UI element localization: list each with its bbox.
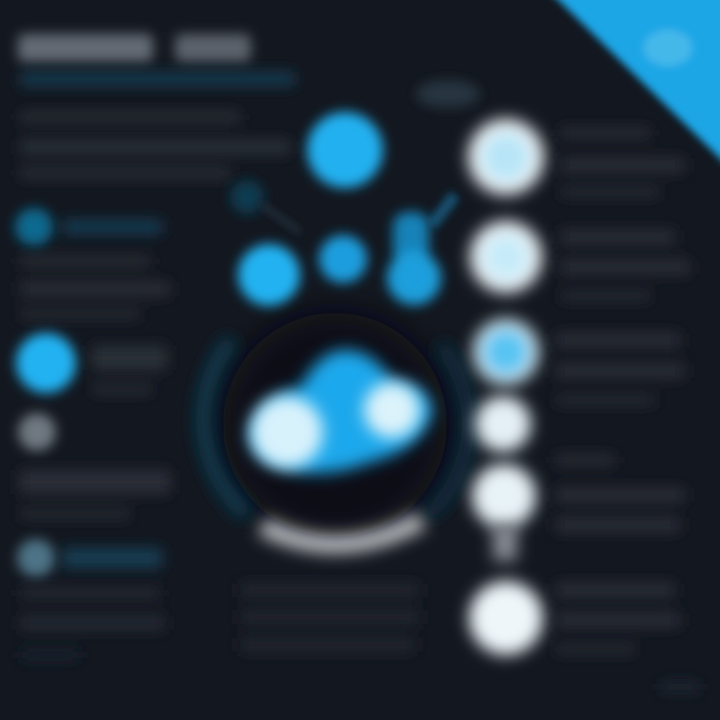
icon: right circle 3 (473, 319, 539, 385)
intro text (20, 112, 290, 178)
item 3 text (20, 470, 170, 518)
left panel: item 4 (17, 539, 165, 660)
central text block (240, 583, 420, 652)
connector lines (262, 195, 455, 232)
left panel: item 2 (16, 333, 167, 393)
icon: right circle 5 (472, 464, 536, 528)
cloud left highlight (251, 396, 323, 468)
item 1 text (20, 220, 170, 318)
left panel: item 1 (15, 208, 170, 318)
item 4 text (20, 548, 165, 660)
ring left arc (204, 340, 248, 515)
connector stub (493, 525, 517, 561)
central caption arc (262, 520, 422, 545)
icon: item 3 (18, 413, 56, 451)
icon: left node (238, 244, 300, 306)
icon: item 4 (17, 539, 55, 577)
cloud right highlight (364, 382, 420, 438)
icon: right circle 2 (470, 221, 542, 293)
footer mark (660, 682, 700, 692)
right column circles (468, 119, 544, 655)
item 2 text (92, 346, 167, 393)
icon: item 1 (15, 208, 53, 246)
icon: item 2 (16, 333, 76, 393)
left panel: item 3 (18, 413, 170, 518)
icon: centre node (319, 235, 367, 283)
right column text (555, 128, 690, 653)
small label top centre (416, 80, 480, 108)
cloud body (250, 350, 432, 473)
title underline (20, 72, 295, 86)
icon: right circle 6 (469, 581, 543, 655)
corner accent (538, 0, 720, 178)
icon: right circle 4 (475, 396, 531, 452)
icon: top centre circle (307, 112, 383, 188)
icon: right circle 1 (468, 119, 544, 195)
title (18, 34, 251, 62)
central cloud graphic (250, 350, 432, 473)
globe interior (223, 313, 447, 537)
ring right arc (428, 345, 468, 515)
central globe ring (204, 313, 468, 537)
icon: right node (387, 212, 441, 305)
icon: small dim circle (230, 180, 264, 214)
